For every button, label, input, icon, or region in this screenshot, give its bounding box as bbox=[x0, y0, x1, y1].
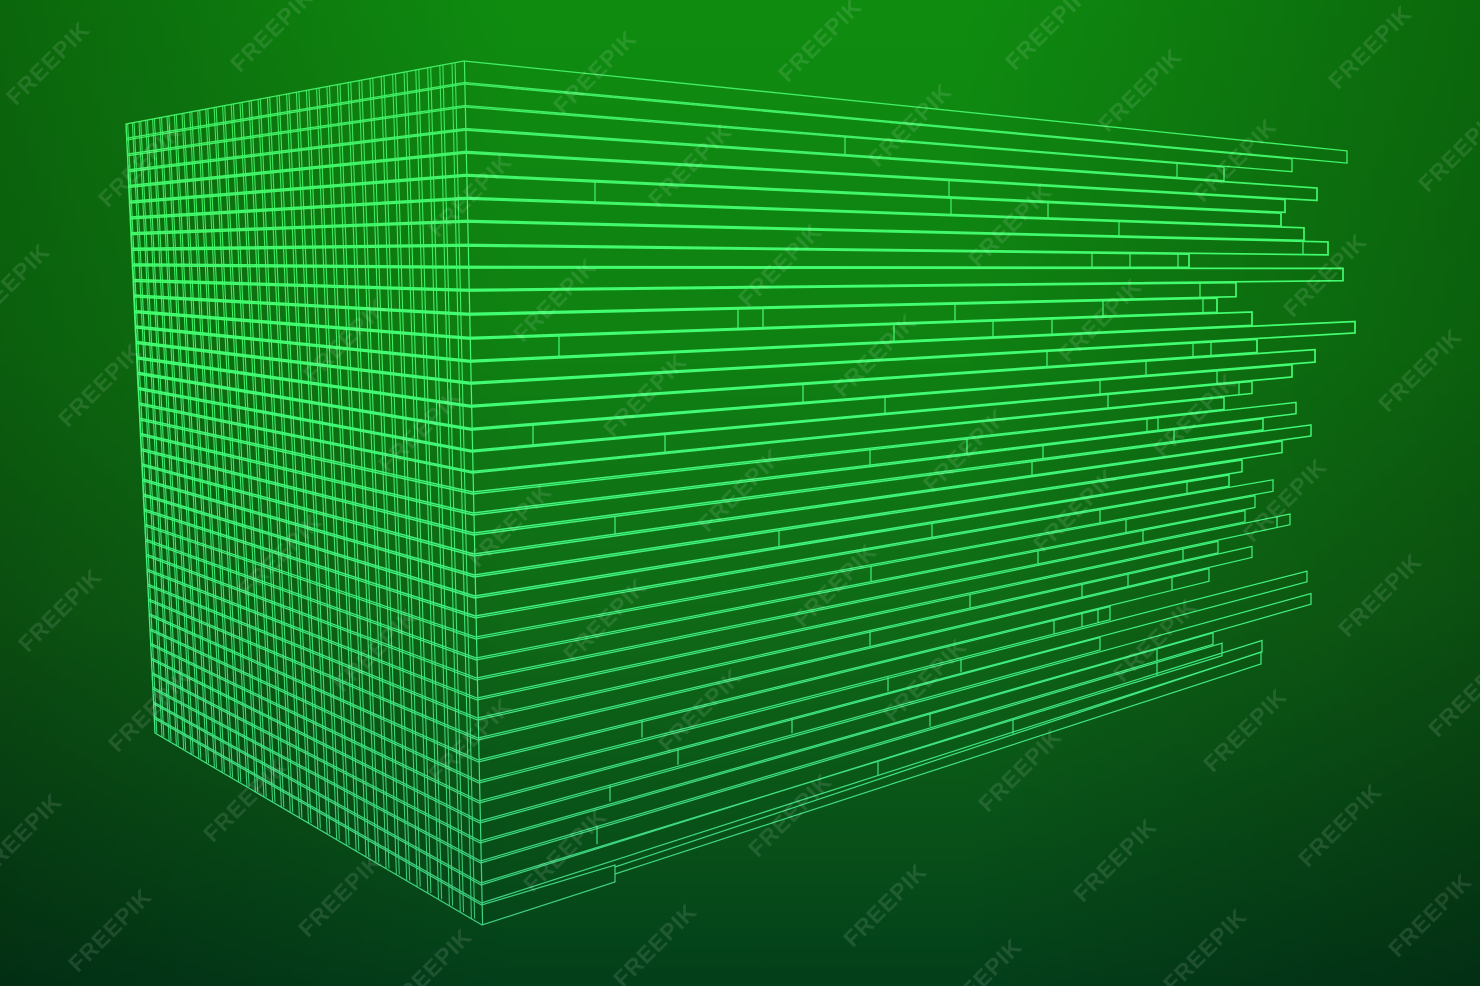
FREEPIK watermarks: FREEPIK bbox=[13, 563, 107, 657]
FREEPIK watermarks: FREEPIK bbox=[373, 383, 467, 477]
FREEPIK watermarks: FREEPIK bbox=[963, 178, 1057, 272]
FREEPIK watermarks: FREEPIK bbox=[733, 218, 827, 312]
FREEPIK watermarks: FREEPIK bbox=[643, 118, 737, 212]
lower bar rows bbox=[144, 480, 1311, 925]
FREEPIK watermarks: FREEPIK bbox=[328, 603, 422, 697]
FREEPIK watermarks: FREEPIK bbox=[198, 753, 292, 847]
FREEPIK watermarks: FREEPIK bbox=[1373, 323, 1467, 417]
FREEPIK watermarks: FREEPIK bbox=[1053, 273, 1147, 367]
FREEPIK watermarks: FREEPIK bbox=[423, 693, 517, 787]
FREEPIK watermarks: FREEPIK bbox=[103, 663, 197, 757]
FREEPIK watermarks: FREEPIK bbox=[548, 25, 642, 119]
FREEPIK watermarks: FREEPIK bbox=[463, 478, 557, 572]
FREEPIK watermarks: FREEPIK bbox=[63, 883, 157, 977]
FREEPIK watermarks: FREEPIK bbox=[1028, 463, 1122, 557]
middle bar rows bbox=[138, 382, 1311, 616]
FREEPIK watermarks: FREEPIK bbox=[598, 348, 692, 442]
FREEPIK watermarks: FREEPIK bbox=[788, 538, 882, 632]
FREEPIK watermarks: FREEPIK bbox=[558, 573, 652, 667]
front corner edge bbox=[464, 61, 483, 925]
left face partner column lines bbox=[128, 63, 475, 919]
FREEPIK watermarks: FREEPIK bbox=[1323, 0, 1417, 94]
FREEPIK watermarks: FREEPIK bbox=[1333, 548, 1427, 642]
FREEPIK watermarks: FREEPIK bbox=[973, 723, 1067, 817]
FREEPIK watermarks: FREEPIK bbox=[508, 253, 602, 347]
FREEPIK watermarks: FREEPIK bbox=[53, 338, 147, 432]
FREEPIK watermarks: FREEPIK bbox=[1108, 593, 1202, 687]
FREEPIK watermarks: FREEPIK bbox=[298, 293, 392, 387]
FREEPIK watermarks: FREEPIK bbox=[1093, 43, 1187, 137]
FREEPIK watermarks: FREEPIK bbox=[423, 148, 517, 242]
left face column lines bbox=[126, 63, 471, 919]
FREEPIK watermarks: FREEPIK bbox=[1238, 453, 1332, 547]
FREEPIK watermarks: FREEPIK bbox=[293, 848, 387, 942]
FREEPIK watermarks: FREEPIK bbox=[1, 16, 95, 110]
FREEPIK watermarks: FREEPIK bbox=[1278, 228, 1372, 322]
FREEPIK watermarks: FREEPIK bbox=[918, 403, 1012, 497]
FREEPIK watermarks: FREEPIK bbox=[1068, 813, 1162, 907]
FREEPIK watermarks: FREEPIK bbox=[693, 443, 787, 537]
FREEPIK watermarks: FREEPIK bbox=[743, 768, 837, 862]
FREEPIK watermarks: FREEPIK bbox=[1383, 868, 1477, 962]
FREEPIK watermarks: FREEPIK bbox=[1188, 113, 1282, 207]
FREEPIK watermarks: FREEPIK bbox=[233, 508, 327, 602]
FREEPIK watermarks: FREEPIK bbox=[878, 633, 972, 727]
FREEPIK watermarks: FREEPIK bbox=[1148, 368, 1242, 462]
bright bar rows bbox=[128, 130, 1355, 450]
wireframe block bbox=[126, 61, 1355, 925]
FREEPIK watermarks: FREEPIK bbox=[93, 118, 187, 212]
FREEPIK watermarks: FREEPIK bbox=[653, 663, 747, 757]
FREEPIK watermarks: FREEPIK bbox=[863, 78, 957, 172]
FREEPIK watermarks: FREEPIK bbox=[518, 803, 612, 897]
FREEPIK watermarks: FREEPIK bbox=[1198, 683, 1292, 777]
FREEPIK watermarks: FREEPIK bbox=[828, 308, 922, 402]
FREEPIK watermarks: FREEPIK bbox=[1293, 778, 1387, 872]
upper bar rows bbox=[126, 61, 1347, 181]
FREEPIK watermarks: FREEPIK bbox=[838, 858, 932, 952]
bar segment joints bbox=[533, 137, 1303, 844]
